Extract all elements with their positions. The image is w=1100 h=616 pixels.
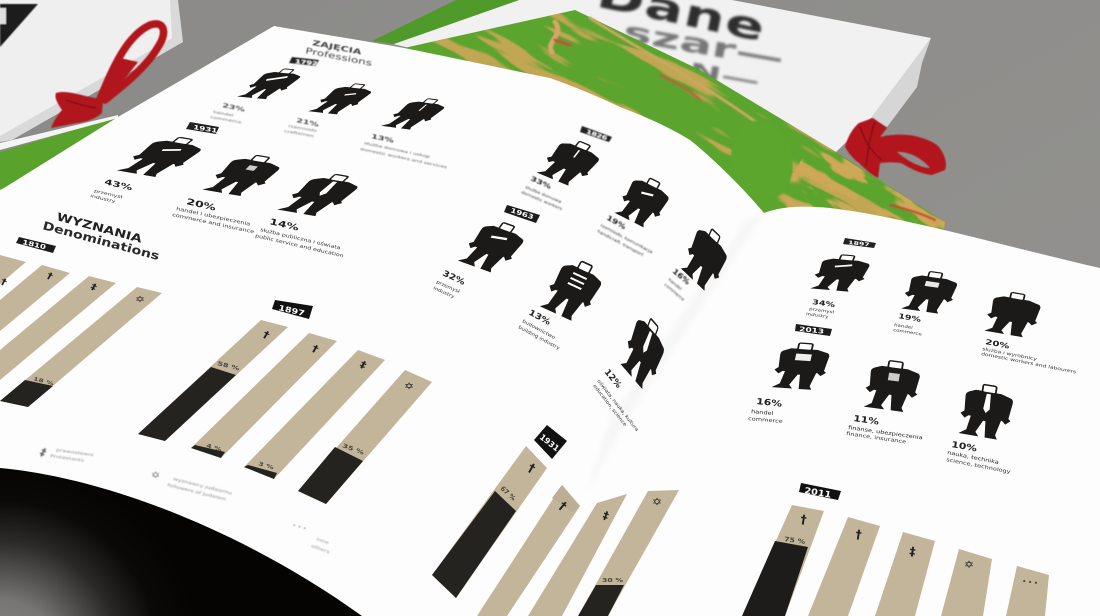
back book cover with title [372,0,931,152]
filled 18% [0,380,53,407]
bar icons: ✡ [404,381,414,392]
label 16% [748,397,783,425]
group: professions 1963 [432,205,669,433]
label 20% [981,338,1077,375]
tag 1897 [843,238,876,248]
tag 1792 [289,57,319,67]
label 12%: education, science [592,384,628,428]
tag 1792: 1792 [295,58,318,67]
figure 19% [900,269,961,315]
bar chart 1810 [0,237,162,407]
bar 4 [578,490,679,616]
label 21%: rzemiosło [288,124,317,133]
label 32%: przemysł [435,280,461,295]
bar chart 1897: 1897 [277,304,305,319]
label 23%: 23% [222,102,246,113]
bar chart 2011: 75 % [784,535,806,546]
bar chart 2011 [742,483,1049,616]
bar values [206,360,365,471]
gutter shading [585,213,764,495]
label 13% [517,308,561,351]
label 14%: public service and education [255,234,344,259]
bar 35% [298,370,432,504]
label 43%: industry [90,194,116,204]
figure 11% [862,358,922,413]
figure 33% [536,135,606,189]
group: professions 1826 [520,126,732,303]
figure 20% [201,152,288,198]
bar chart 2011: ✡ [964,559,974,571]
tag 1826 [580,126,612,142]
label 11%: finanse, ubezpieczenia [848,426,923,441]
bar chart 1931: † [526,460,538,476]
bar chart 1897 [138,300,432,504]
label 19%: commerce [893,328,922,337]
bar 2 [808,517,880,616]
sheet white edge [0,115,118,150]
group: professions 1963: 1963 [509,206,535,221]
label 13%: budownictwo [521,319,556,341]
label 13%: służba domowa i usługi [364,141,430,159]
label 16%: commerce [748,417,783,425]
legend: ✡ [151,471,160,481]
bar chart 1810: 1810 [22,238,47,251]
label 33% [520,175,564,212]
figure 14% [276,171,367,218]
bar chart 2011: 2011 [804,487,832,500]
closed book top left [0,0,183,142]
bar 75% [742,505,824,616]
figure 34% [809,253,873,293]
label 12%: 12% [602,368,623,391]
heading: denominations: Denominations [41,220,161,264]
label 21% [284,117,320,139]
bar values: 35 % [341,442,365,456]
label 21%: craftsmen [284,129,314,139]
figure 20% [983,289,1043,339]
label 16% [663,267,692,303]
heading: denominations: WYZNANIA [55,211,143,246]
label 20%: commerce and insurance [172,213,255,235]
label 13%: 13% [371,133,395,144]
label 11% [846,414,923,445]
label 23%: commerce [210,115,242,125]
label 16%: commerce [663,282,686,303]
legend: prawosławni [56,448,94,458]
green strip of back sheet [372,0,519,44]
label 16%: handel [751,410,774,417]
label 10% [946,440,1011,475]
bar chart 1810: ‡ [89,282,98,293]
label 20%: domestic workers and labourers [981,352,1077,375]
label 19% [893,312,922,337]
group: professions 1792 [210,57,452,170]
label 34%: przemysł [809,307,835,315]
tag 1826: 1826 [585,129,608,142]
label 20%: 20% [985,338,1010,351]
bar chart 1931: ✡ [652,496,662,508]
label 32% [432,269,466,300]
label 10%: nauka, technika [947,451,1000,466]
tag 1931 [186,122,219,134]
green sheet left [0,117,118,190]
bar chart 2011: ‡ [909,544,916,559]
tag 2011 [799,483,841,500]
label 11%: finance, insurance [846,432,907,445]
bar icons: † [310,342,321,356]
legend: followers of Judaism [167,483,226,502]
label 32%: 32% [441,269,466,287]
label 33%: domestic workers [520,190,564,212]
label 10%: science, technology [946,458,1011,475]
label 13%: building industry [517,325,561,351]
label 23%: handel [213,110,234,118]
label 19% [596,214,654,258]
tag 2013 [795,324,832,336]
bar chart 2011: † [800,512,807,527]
heading: professions: ZAJĘCIA [312,39,363,57]
tag 1931 [534,425,567,459]
bar 5 [1006,566,1049,616]
label 16%: handel [667,277,683,292]
bar chart 1931: ‡ [601,509,611,523]
bar chart 1810: 18 % [33,376,55,387]
figure 13% [380,97,452,131]
legend [38,445,330,555]
legend: Protestants [50,454,85,463]
figure 32% [457,217,531,276]
bar chart 1810: ✡ [135,295,145,304]
figure 12% [620,307,669,396]
label 34%: industry [806,312,829,320]
bar 4 [941,549,992,616]
figure 16% [680,218,732,297]
bar chart 1810: † [45,271,54,282]
label 19%: rzemiosło, komunikacja [599,223,654,255]
figure 23% [236,68,308,100]
label 11%: 11% [853,414,880,427]
label 43% [90,178,133,204]
bar 3 [528,494,627,616]
heading: professions: Professions [305,47,373,68]
group: professions 2013: 2013 [799,325,824,335]
book title [593,0,786,93]
label 32%: industry [432,286,455,300]
label 19%: 19% [605,214,627,231]
label 43%: 43% [103,178,133,193]
figure 21% [307,82,379,115]
tag 1810 [16,237,56,253]
figure 13% [539,254,608,325]
label 19%: 19% [898,312,922,324]
group: professions 1897 [806,238,1077,375]
label 14%: służba publiczna i oświata [260,227,341,251]
legend: • • • [291,522,307,533]
legend: others [310,544,330,555]
label 43%: przemysł [94,189,123,200]
label 21%: 21% [296,117,320,128]
bar chart 1931: 67 % [499,485,518,503]
group: professions 1897: 1897 [848,240,870,248]
book title: szar— [621,16,786,75]
group: professions 1931 [90,122,367,259]
label 20%: 20% [185,196,217,213]
label 10%: 10% [951,440,978,454]
label 14%: 14% [268,216,300,233]
bar chart 1931: † [556,499,570,513]
marbled green endpaper [404,10,945,230]
label 19%: handel [894,323,913,331]
bar 4% [191,333,337,458]
label 20%: handel i ubezpieczenia [176,207,251,227]
bar values: 58 % [217,360,240,372]
legend: ‡ [38,445,49,460]
label 33%: służba domowa [524,185,562,205]
bar chart 2011: • • • [1022,578,1038,587]
bar chart 2011: † [855,527,862,542]
group: professions 1931: 1931 [193,124,218,134]
label 13%: domestic workers and services [360,147,448,170]
bar values: 4 % [206,442,223,453]
left page [0,26,764,616]
bar 2 folded [477,485,580,616]
black cover detail [0,4,38,47]
dark shadow under booklet [0,460,370,616]
label 16%: 16% [671,267,692,286]
bar 3% [244,350,385,479]
figure 10% [957,381,1015,441]
legend: inne [315,537,329,546]
figure 43% [116,134,211,179]
label 34% [806,298,836,320]
red ribbon left [51,24,164,128]
label 20% [172,196,255,235]
bar 67% [432,446,547,598]
figure 19% [614,171,674,231]
label 33%: 33% [529,175,552,190]
legend: wyznawcy judaizmu [173,477,232,496]
bar christian 58% [138,320,288,441]
bar icons: ‡ [358,358,369,372]
bar icons [261,328,414,392]
figure 16% [770,342,832,391]
right page [560,207,1100,616]
group: professions 2013 [748,324,1015,475]
label 20%: służba i wyrobnicy [982,347,1037,362]
bar chart 1931: 30 % [602,577,623,584]
bar chart 1931: 1931 [538,432,561,454]
label 16%: 16% [756,397,783,409]
bar icons: † [261,328,272,342]
tag 1897 [272,300,313,319]
bar 3 [875,532,935,616]
book title: N— [687,59,762,93]
label 13% [360,133,448,170]
label 23% [210,102,246,125]
label 19%: handicraft, transport [596,229,644,258]
label 14% [255,216,344,259]
label 12%: oświata, nauka, kultura [596,378,640,433]
red ribbon right [845,118,946,178]
bar chart 1931 [432,425,679,616]
label 34%: 34% [812,298,836,309]
tag 1963 [504,205,540,223]
bar values: 3 % [258,460,275,471]
label 13%: 13% [527,308,552,327]
